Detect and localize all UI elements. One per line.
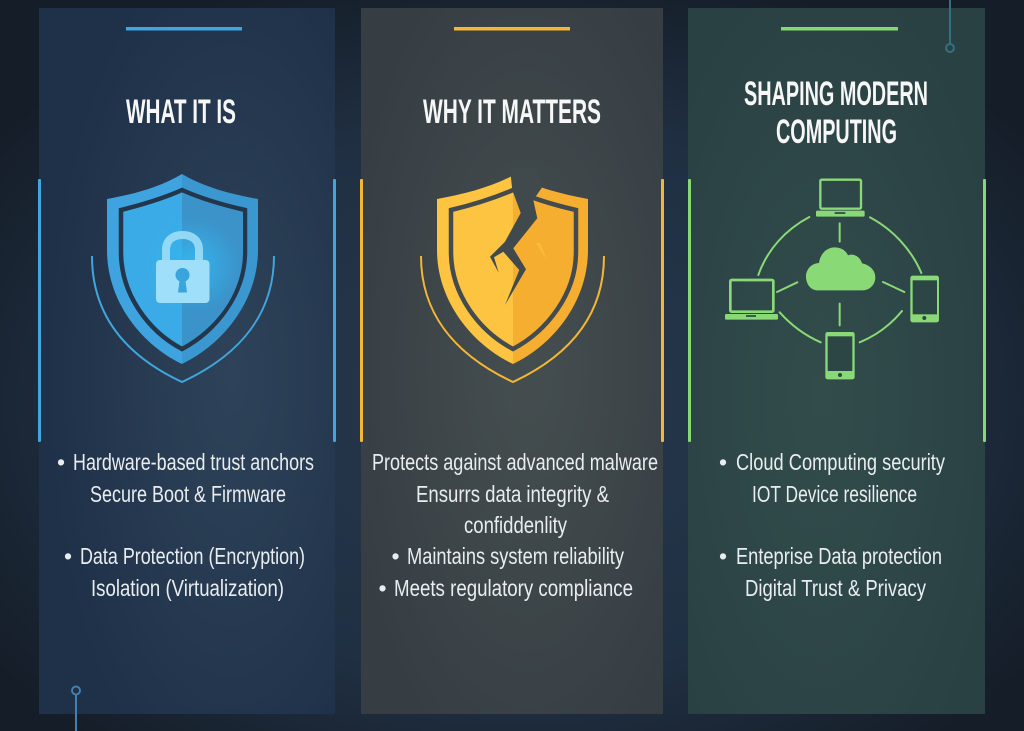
text block: why it matters: Maintains system reliability — [407, 543, 624, 569]
heading: shaping modern computing — [744, 75, 928, 151]
text block: why it matters: Meets regulatory compliance — [394, 575, 633, 601]
top accent bar — [126, 27, 242, 30]
text block: what it is: • — [64, 543, 72, 569]
side line left — [688, 179, 691, 442]
icon: top laptop — [816, 180, 865, 217]
text block: what it is: Data Protection (Encryption) — [80, 543, 305, 569]
connectors — [758, 217, 921, 342]
text block: shaping modern computing: • — [719, 543, 727, 569]
text block: what it is: • — [57, 449, 65, 475]
icon: cloud network — [725, 180, 939, 379]
text block: what it is: Hardware-based trust anchors — [73, 449, 314, 475]
side line left — [360, 179, 363, 442]
text block: why it matters: Ensurrs data integrity & — [416, 481, 609, 507]
text block: shaping modern computing: Digital Trust & Privacy — [745, 575, 926, 601]
text block: shaping modern computing: Cloud Computing security — [736, 449, 945, 475]
panel: why it matters — [360, 8, 664, 714]
text block: why it matters: • — [378, 575, 387, 601]
text block: why it matters: Protects against advanced malware — [372, 449, 658, 475]
text block: shaping modern computing: Enteprise Data protection — [736, 543, 942, 569]
side line right — [983, 179, 986, 442]
text block: why it matters — [372, 449, 658, 601]
icon: bottom tablet — [825, 332, 855, 379]
text block: what it is: Secure Boot & Firmware — [90, 481, 286, 507]
side line right — [661, 179, 664, 442]
text block: why it matters: confiddenlity — [464, 512, 567, 538]
circuit node: bottom left — [72, 686, 80, 731]
text block: why it matters: • — [391, 543, 400, 569]
panel: what it is — [38, 8, 336, 714]
text block: shaping modern computing: IOT Device resilience — [752, 481, 917, 507]
top accent bar — [454, 27, 570, 30]
side line right — [333, 179, 336, 442]
text block: shaping modern computing — [719, 449, 945, 601]
circuit node: top right — [946, 0, 954, 52]
top accent bar — [781, 27, 898, 30]
panel: shaping modern computing — [688, 8, 986, 714]
text block: what it is — [57, 449, 314, 601]
icon: right tablet — [910, 276, 939, 322]
text block: shaping modern computing: • — [719, 449, 727, 475]
icon: cracked shield — [421, 168, 604, 382]
icon: shield with padlock — [92, 174, 274, 382]
heading: why it matters: WHY IT MATTERS — [423, 93, 601, 131]
icon: left laptop — [725, 280, 778, 320]
side line left — [38, 179, 41, 442]
heading: what it is: WHAT IT IS — [126, 93, 236, 131]
heading: shaping modern computing: COMPUTING — [776, 113, 897, 151]
text block: what it is: Isolation (Virtualization) — [91, 575, 284, 601]
icon: cloud — [806, 247, 875, 290]
